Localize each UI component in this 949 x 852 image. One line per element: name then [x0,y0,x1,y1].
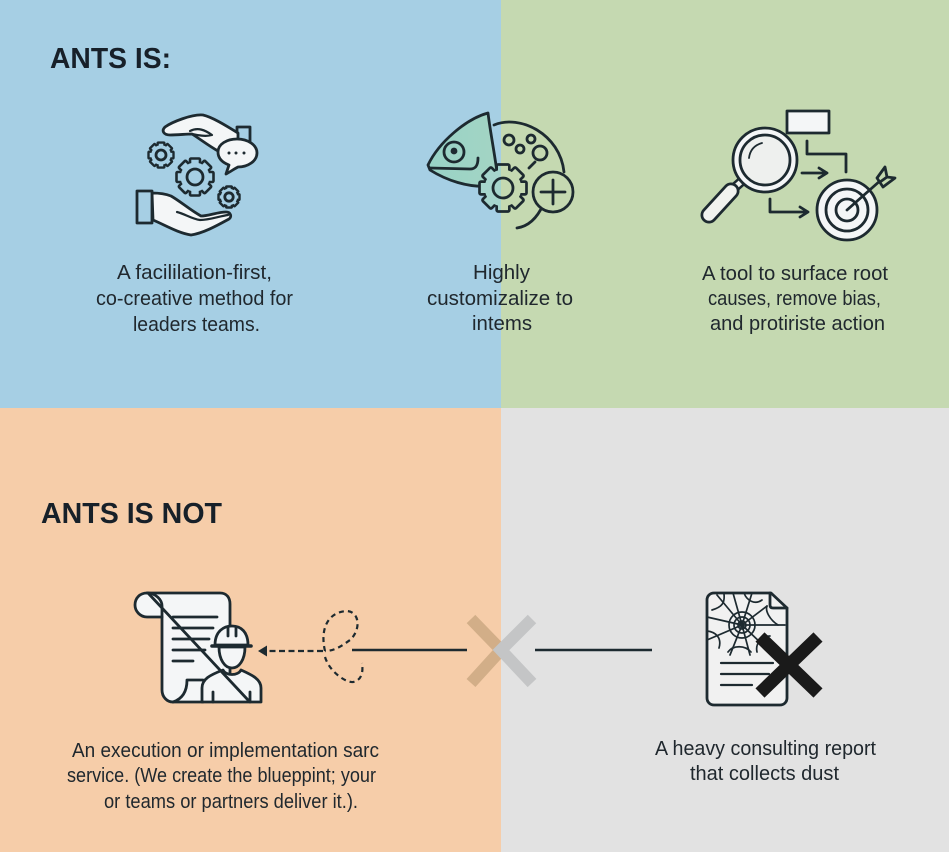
text: execution service [67,740,379,813]
text: root causes: causes, remove bias, [708,288,881,310]
text: execution service: or teams or partners deliver it.). [104,791,358,813]
panel: blue quadrant [0,0,501,408]
icon: document with cobweb and X [707,593,818,705]
icon: hands with gears and speech bubble [137,115,257,235]
text: facilitation-first: A facililation-first, [117,262,272,284]
text: facilitation-first [96,262,293,336]
panel: green quadrant [501,0,949,408]
icon: central faded X [471,619,532,683]
text: execution service: service. (We create the blueppint; your [67,765,376,787]
text: facilitation-first: leaders teams. [133,314,260,336]
icon: chameleon with gear and plus [428,113,573,228]
text: highly customizable: customizalize to [427,288,573,310]
text: highly customizable: Highly [473,262,530,284]
panel: grey quadrant [501,408,949,852]
heading: ANTS IS NOT: ANTS IS NOT [41,498,222,530]
connector line left [352,649,467,651]
text: heavy consulting report [655,738,876,785]
panel: orange quadrant [0,408,501,852]
text: root causes: and protiriste action [710,313,885,335]
text: highly customizable: intems [472,313,532,335]
icon: magnifier and target [709,111,895,240]
heading: ANTS IS: ANTS IS: [50,43,171,75]
text: heavy consulting report: A heavy consulting report [655,738,876,760]
text: execution service: An execution or implementation sarc [72,740,379,762]
text: facilitation-first: co-creative method for [96,288,293,310]
text: heavy consulting report: that collects dust [690,763,839,785]
icon: crossed-out scroll with construction worker [135,593,261,702]
text: root causes [702,263,888,335]
arrow: dashed looping arrow [258,611,362,682]
text: highly customizable [427,262,573,335]
connector line right [535,649,652,651]
text: root causes: A tool to surface root [702,263,888,285]
